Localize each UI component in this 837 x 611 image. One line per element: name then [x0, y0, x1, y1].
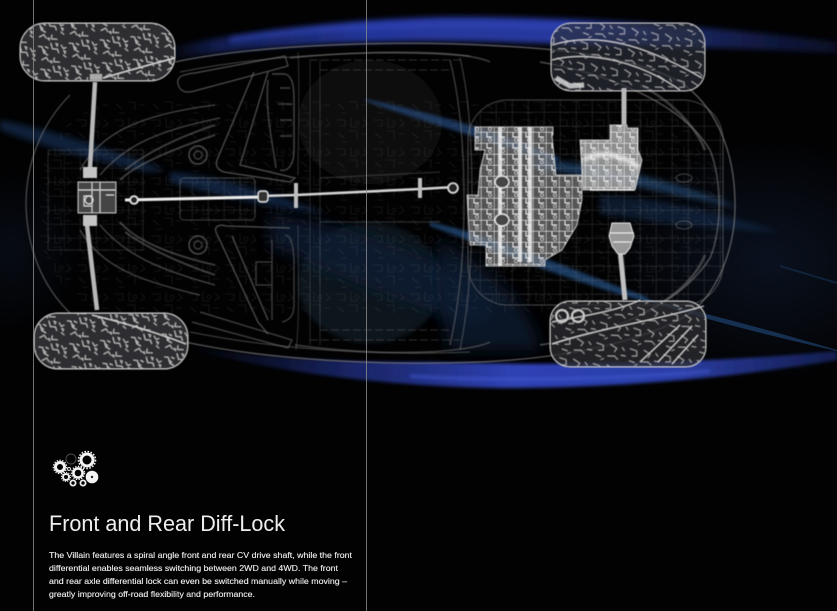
- body text: The Villain features a spiral angle front and rear CV drive shaft, while the front: [49, 551, 353, 560]
- front subframe grid: [468, 100, 723, 305]
- blue light streaks: [0, 99, 837, 351]
- front differential and gearbox: [580, 125, 642, 190]
- rear frame: [48, 150, 143, 250]
- engine block: [467, 127, 582, 266]
- front axle: [609, 88, 634, 300]
- front-left tire: [551, 23, 705, 91]
- car chassis wireframe: [26, 43, 735, 363]
- cabin pods: [272, 74, 294, 170]
- body text: greatly improving off-road flexibility and performance.: [49, 590, 255, 599]
- blue light band: bottom: [190, 346, 837, 388]
- drive shaft: [125, 178, 458, 208]
- pillars: [216, 72, 295, 182]
- blue light band: top: [165, 17, 837, 60]
- side sills: [178, 56, 288, 92]
- body text: [49, 551, 353, 599]
- bushing rings: [189, 146, 207, 164]
- icon: gears: [53, 452, 98, 486]
- body outer outline: [26, 95, 72, 315]
- body detail texture: [40, 100, 720, 315]
- rear axle and differential: [78, 82, 116, 310]
- rear-left tire: [20, 23, 175, 81]
- front-right tire: [550, 300, 706, 367]
- body text: differential enables seamless switching between 2WD and 4WD. The front: [49, 564, 339, 573]
- inner arches: [80, 225, 215, 295]
- rear-right tire: [34, 313, 188, 369]
- body text: and rear axle differential lock can even be switched manually while moving –: [49, 577, 348, 586]
- tunnel lines: [310, 60, 320, 345]
- title: Front and Rear Diff-Lock: [49, 511, 286, 536]
- vertical guide lines: [34, 0, 366, 611]
